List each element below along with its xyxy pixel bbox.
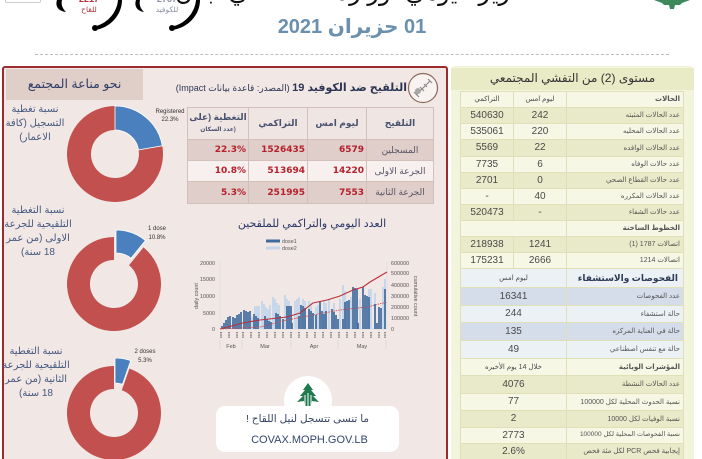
dashed divider: [35, 54, 669, 55]
label: first dose value: 10.8%: [148, 235, 166, 241]
table: epidemiological indicators: [460, 359, 684, 459]
table: cases: 6: [537, 158, 543, 170]
callout: register for vaccine: COVAX.MOPH.GOV.LB: [251, 434, 368, 446]
chart: daily and cumulative doses: May: [357, 344, 367, 350]
table: tests and hospitalisation: حالة استشفاء: [641, 310, 680, 318]
table: epidemiological indicators: 2773: [502, 430, 525, 440]
donut: first dose: [67, 230, 161, 331]
table: tests and hospitalisation: [460, 269, 684, 358]
chart: daily and cumulative doses: Mar: [260, 344, 270, 350]
table: cases: عدد حالات الوفاه: [631, 161, 680, 168]
chart: daily and cumulative doses: dose1: [282, 239, 297, 245]
label: registration coverage: نسبة تغطية: [11, 104, 59, 115]
table: vaccination: 513694: [267, 166, 305, 176]
table: cases: 7735: [476, 158, 498, 170]
label: second dose coverage: 18 سنة): [19, 388, 53, 399]
label: first dose coverage: التلقيحية للجرعة: [4, 219, 72, 230]
table: cases: -: [538, 206, 542, 218]
table: vaccination: 6579: [339, 145, 364, 155]
label: first dose coverage: 18 سنة): [21, 247, 55, 258]
table: cases: عدد الحالات الوافده: [624, 144, 680, 152]
table: cases: 242: [532, 110, 548, 120]
table: epidemiological indicators: خلال 14 يوم الأخيره: [485, 364, 542, 370]
table: cases: الحالات: [655, 96, 680, 103]
table: vaccination: التغطية (على: [189, 112, 247, 122]
table: cases: 0: [537, 174, 543, 186]
chart: daily and cumulative doses: 300000: [391, 294, 409, 300]
chart: daily and cumulative doses: 400000: [391, 283, 409, 289]
table: cases: ليوم امس: [526, 96, 554, 103]
chart: daily and cumulative doses: 100000: [391, 316, 409, 322]
label: second dose coverage: التلقيحية للجرعة: [2, 360, 70, 371]
label: first dose value: [148, 226, 166, 241]
table: cases: 2666: [529, 254, 551, 266]
vaccine counter: للقاح: [81, 5, 97, 14]
table: epidemiological indicators: نسبة الوفيات لكل 10000: [607, 416, 680, 422]
chart: daily and cumulative doses: daily count: [194, 283, 200, 309]
table: cases: 22: [534, 142, 546, 153]
panel: community spread: [451, 66, 694, 459]
label: registered value: [155, 108, 184, 123]
donut: registered: [67, 106, 163, 202]
vaccine counter: [79, 0, 99, 14]
label: registration coverage: [6, 104, 64, 143]
table: tests and hospitalisation: 49: [508, 344, 519, 354]
callout: register for vaccine: ما تنسى تتسجل لنيل اللقاح !: [246, 413, 369, 425]
chart: daily and cumulative doses: 15000: [200, 277, 215, 283]
heading: community spread level: مستوى (2) من التفشي المجتمعي: [490, 71, 655, 85]
label: first dose coverage: الاولى (من عمر: [6, 233, 70, 244]
table: cases: التراكمي: [474, 96, 500, 103]
chart: daily and cumulative doses: 0: [391, 327, 394, 333]
chart: daily and cumulative doses: Feb: [226, 344, 236, 350]
heading: towards community immunity: [6, 69, 143, 100]
table: vaccination: 251995: [267, 188, 305, 198]
table: vaccination: المسجلين: [382, 144, 418, 154]
table: vaccination: الجرعة الاولى: [375, 166, 425, 176]
label: registration coverage: الاعمار): [19, 132, 51, 143]
table: tests and hospitalisation: 16341: [500, 290, 527, 302]
table: vaccination: 5.3%: [221, 188, 246, 198]
label: first dose coverage: [4, 205, 72, 258]
table: cases: 535061: [470, 126, 504, 136]
chart: daily and cumulative doses: 5000: [203, 311, 215, 317]
table: vaccination: 14220: [333, 166, 364, 176]
table: vaccination: ليوم امس: [315, 118, 359, 128]
table: cases: [460, 91, 684, 268]
table: cases: 540630: [470, 110, 504, 120]
chart: daily and cumulative doses: Apr: [310, 344, 318, 350]
table: vaccination: عدد السكان): [200, 127, 236, 133]
table: vaccination: 10.8%: [215, 166, 246, 176]
label: registered value: 22.3%: [161, 117, 178, 123]
table: epidemiological indicators: 4076: [502, 378, 525, 390]
heading: chart: العدد اليومي والتراكمي للملقحين: [238, 218, 386, 230]
table: epidemiological indicators: 2: [511, 413, 516, 424]
table: vaccination: 22.3%: [215, 145, 246, 155]
table: tests and hospitalisation: ليوم امس: [499, 274, 528, 282]
heading: vaccination table: التلقيح ضد الكوفيد 19 (المصدر: قاعدة بيانات Impact): [176, 82, 407, 94]
label: second dose coverage: الثانية (من عمر: [5, 374, 67, 385]
table: cases: 5569: [476, 142, 498, 153]
table: cases: 1241: [529, 238, 551, 250]
date heading: 01 حزيران 2021: [278, 16, 426, 38]
callout: register for vaccine: [216, 406, 399, 452]
table: cases: 2701: [476, 174, 498, 186]
label: registered value: Registered: [155, 109, 184, 115]
label: second dose value: 5.3%: [138, 358, 152, 364]
table: vaccination: 1526435: [261, 145, 305, 155]
table: cases: عدد حالات الشفاء: [629, 209, 680, 216]
table: cases: -: [485, 190, 489, 202]
black swoosh counters: [56, 0, 200, 31]
chart: daily and cumulative doses: dose2: [282, 246, 297, 252]
table: epidemiological indicators: إيجابية فحص PCR لكل مئة فحص: [583, 448, 680, 455]
table: tests and hospitalisation: عدد الفحوصات: [637, 293, 680, 300]
chart: daily and cumulative doses: 200000: [391, 305, 409, 311]
label: first dose coverage: نسبة التغطية: [11, 205, 65, 216]
table: epidemiological indicators: 77: [508, 396, 519, 407]
label: second dose value: [134, 348, 156, 364]
table: cases: 520473: [470, 206, 504, 218]
table: vaccination: التراكمي: [258, 118, 298, 128]
table: cases: 220: [532, 126, 548, 136]
chart: daily and cumulative doses: 600000: [391, 261, 409, 267]
label: second dose value: 2 doses: [134, 349, 156, 355]
label: first dose value: 1 dose: [148, 226, 166, 232]
table: cases: عدد الحالات المكرره: [621, 193, 680, 200]
chart: daily and cumulative doses: 10000: [200, 294, 215, 300]
panel: vaccination: [2, 66, 448, 459]
label: second dose coverage: نسبة التغطية: [9, 346, 63, 357]
chart: daily and cumulative doses: 500000: [391, 271, 409, 277]
covid counter: [156, 0, 178, 14]
heading: towards community immunity: نحو مناعة المجتمع: [28, 77, 121, 91]
covid counter: للكوفيد: [156, 5, 178, 14]
table: cases: عدد حالات القطاع الصحي: [606, 177, 680, 184]
table: epidemiological indicators: 2.6%: [502, 446, 525, 456]
table: epidemiological indicators: نسبة الحدوث المحلية لكل 100000: [580, 398, 680, 406]
label: registration coverage: التسجيل (كافة: [6, 118, 64, 129]
table: tests and hospitalisation: 244: [505, 308, 522, 319]
chart: daily and cumulative doses: cumulative count: [412, 276, 418, 317]
table: tests and hospitalisation: الفحوصات والاستشفاء: [578, 272, 678, 282]
table: cases: اتصالات 1214: [640, 257, 680, 264]
table: cases: 218938: [470, 238, 504, 250]
table: tests and hospitalisation: حالة مع تنفس اصطناعي: [610, 346, 680, 353]
table: tests and hospitalisation: 135: [505, 326, 522, 336]
table: cases: اتصالات 1787 (1): [629, 241, 680, 248]
heading: community spread level: [451, 68, 694, 90]
logo circle: cedar: [284, 376, 332, 406]
table: vaccination: الجرعة الثانية: [375, 187, 425, 197]
table: cases: عدد الحالات المحليه: [623, 128, 680, 135]
table: vaccination: التلقيح: [385, 118, 415, 128]
table: vaccination: 7553: [339, 188, 364, 198]
table: epidemiological indicators: عدد الحالات النشطة: [622, 381, 680, 388]
label: second dose coverage: [2, 346, 70, 399]
table: cases: عدد الحالات المثبته: [626, 112, 680, 119]
donut: second dose: [67, 358, 161, 459]
table: cases: 40: [534, 190, 546, 202]
icon: vaccine circle: [408, 72, 438, 104]
table: vaccination: [187, 107, 434, 204]
chart: daily and cumulative doses: 0: [212, 327, 215, 333]
table: tests and hospitalisation: حالة في العناية المركزه: [612, 328, 680, 335]
top left tab: [5, 0, 41, 3]
chart: daily and cumulative doses: 20000: [200, 261, 215, 267]
table: cases: الخطوط الساخنة: [623, 225, 680, 232]
table: epidemiological indicators: المؤشرات الوبائية: [619, 364, 680, 370]
table: cases: 175231: [470, 254, 504, 266]
chart: daily and cumulative doses: [194, 239, 418, 350]
cedar logo top right: [654, 0, 690, 9]
table: epidemiological indicators: نسبة الفحوصات المحلية لكل 100000: [580, 431, 680, 438]
